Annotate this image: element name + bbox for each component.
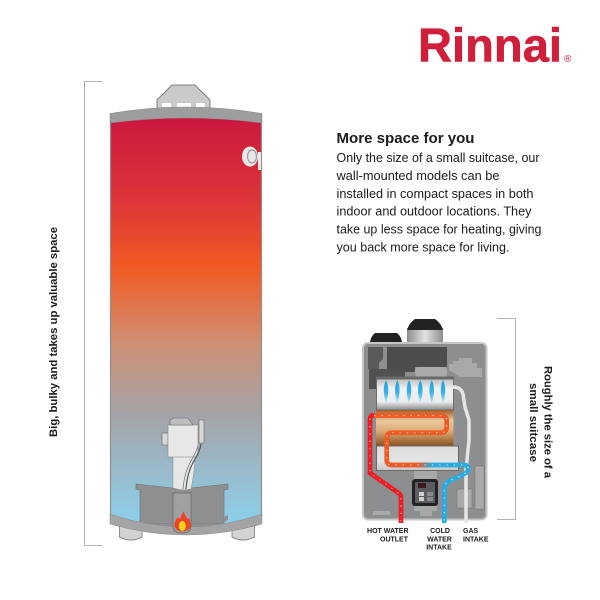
label: roughly the size of a small suitcase: small suitcase <box>527 383 539 462</box>
label: gas intake: GAS <box>463 528 478 535</box>
bottom cap <box>110 514 262 535</box>
top vents <box>370 319 443 343</box>
hot water pipe <box>370 416 401 523</box>
tankless water heater <box>363 319 486 523</box>
gas control valve <box>162 418 204 489</box>
flame icon <box>174 511 191 532</box>
combustion chamber base <box>136 484 228 531</box>
burner tube <box>173 456 195 490</box>
pipe dots <box>370 416 468 523</box>
flue vent on top <box>157 85 210 109</box>
control panel <box>412 479 438 506</box>
casing <box>363 343 486 520</box>
left bracket: tank height <box>84 82 102 546</box>
label: big, bulky: Big, bulky and takes up valuable space <box>48 227 60 437</box>
label: hot water outlet <box>367 528 409 544</box>
label: roughly the size of a small suitcase <box>527 366 554 479</box>
dark inner components <box>368 347 482 389</box>
anode fitting <box>242 146 261 170</box>
tank water heater <box>110 85 262 540</box>
label: gas intake: INTAKE <box>463 536 489 544</box>
label: cold water intake: INTAKE <box>426 544 452 552</box>
label: hot water outlet: OUTLET <box>380 536 409 544</box>
heading: more space for you: More space for you <box>336 130 474 147</box>
body paragraph: you back more space for living. <box>336 240 510 254</box>
label: gas intake <box>463 528 489 544</box>
cold water pipe <box>417 465 468 523</box>
label: hot water outlet: HOT WATER <box>367 528 408 535</box>
Rinnai logo: ® <box>564 54 572 65</box>
blue flames <box>384 380 445 403</box>
right bracket: tankless height <box>497 318 516 520</box>
body paragraph: wall-mounted models can be <box>336 168 500 183</box>
copper heat exchanger <box>376 410 454 446</box>
Rinnai logo: Rinnai <box>418 18 562 72</box>
feet <box>120 522 254 540</box>
body paragraph: indoor and outdoor locations. They <box>336 204 532 218</box>
body paragraph: Only the size of a small suitcase, our <box>336 150 540 165</box>
label: cold water intake: WATER <box>427 536 452 544</box>
side walls <box>110 120 262 516</box>
coil pipe <box>374 416 447 465</box>
label: roughly the size of a small suitcase: Roughly the size of a <box>542 366 554 479</box>
control panel mount <box>414 471 437 516</box>
label: cold water intake: COLD <box>430 528 450 535</box>
body paragraph: installed in compact spaces in both <box>336 186 534 201</box>
tank gradient body <box>111 115 261 528</box>
burner box <box>376 377 454 410</box>
lower chamber <box>376 446 458 470</box>
body paragraph <box>336 150 542 254</box>
gas pipe <box>453 387 469 523</box>
body paragraph: take up less space for heating, giving <box>336 222 542 236</box>
burner tube chimney <box>173 493 191 533</box>
side components and gas valve <box>373 466 484 515</box>
label: cold water intake <box>426 528 452 552</box>
top cap <box>110 107 262 123</box>
